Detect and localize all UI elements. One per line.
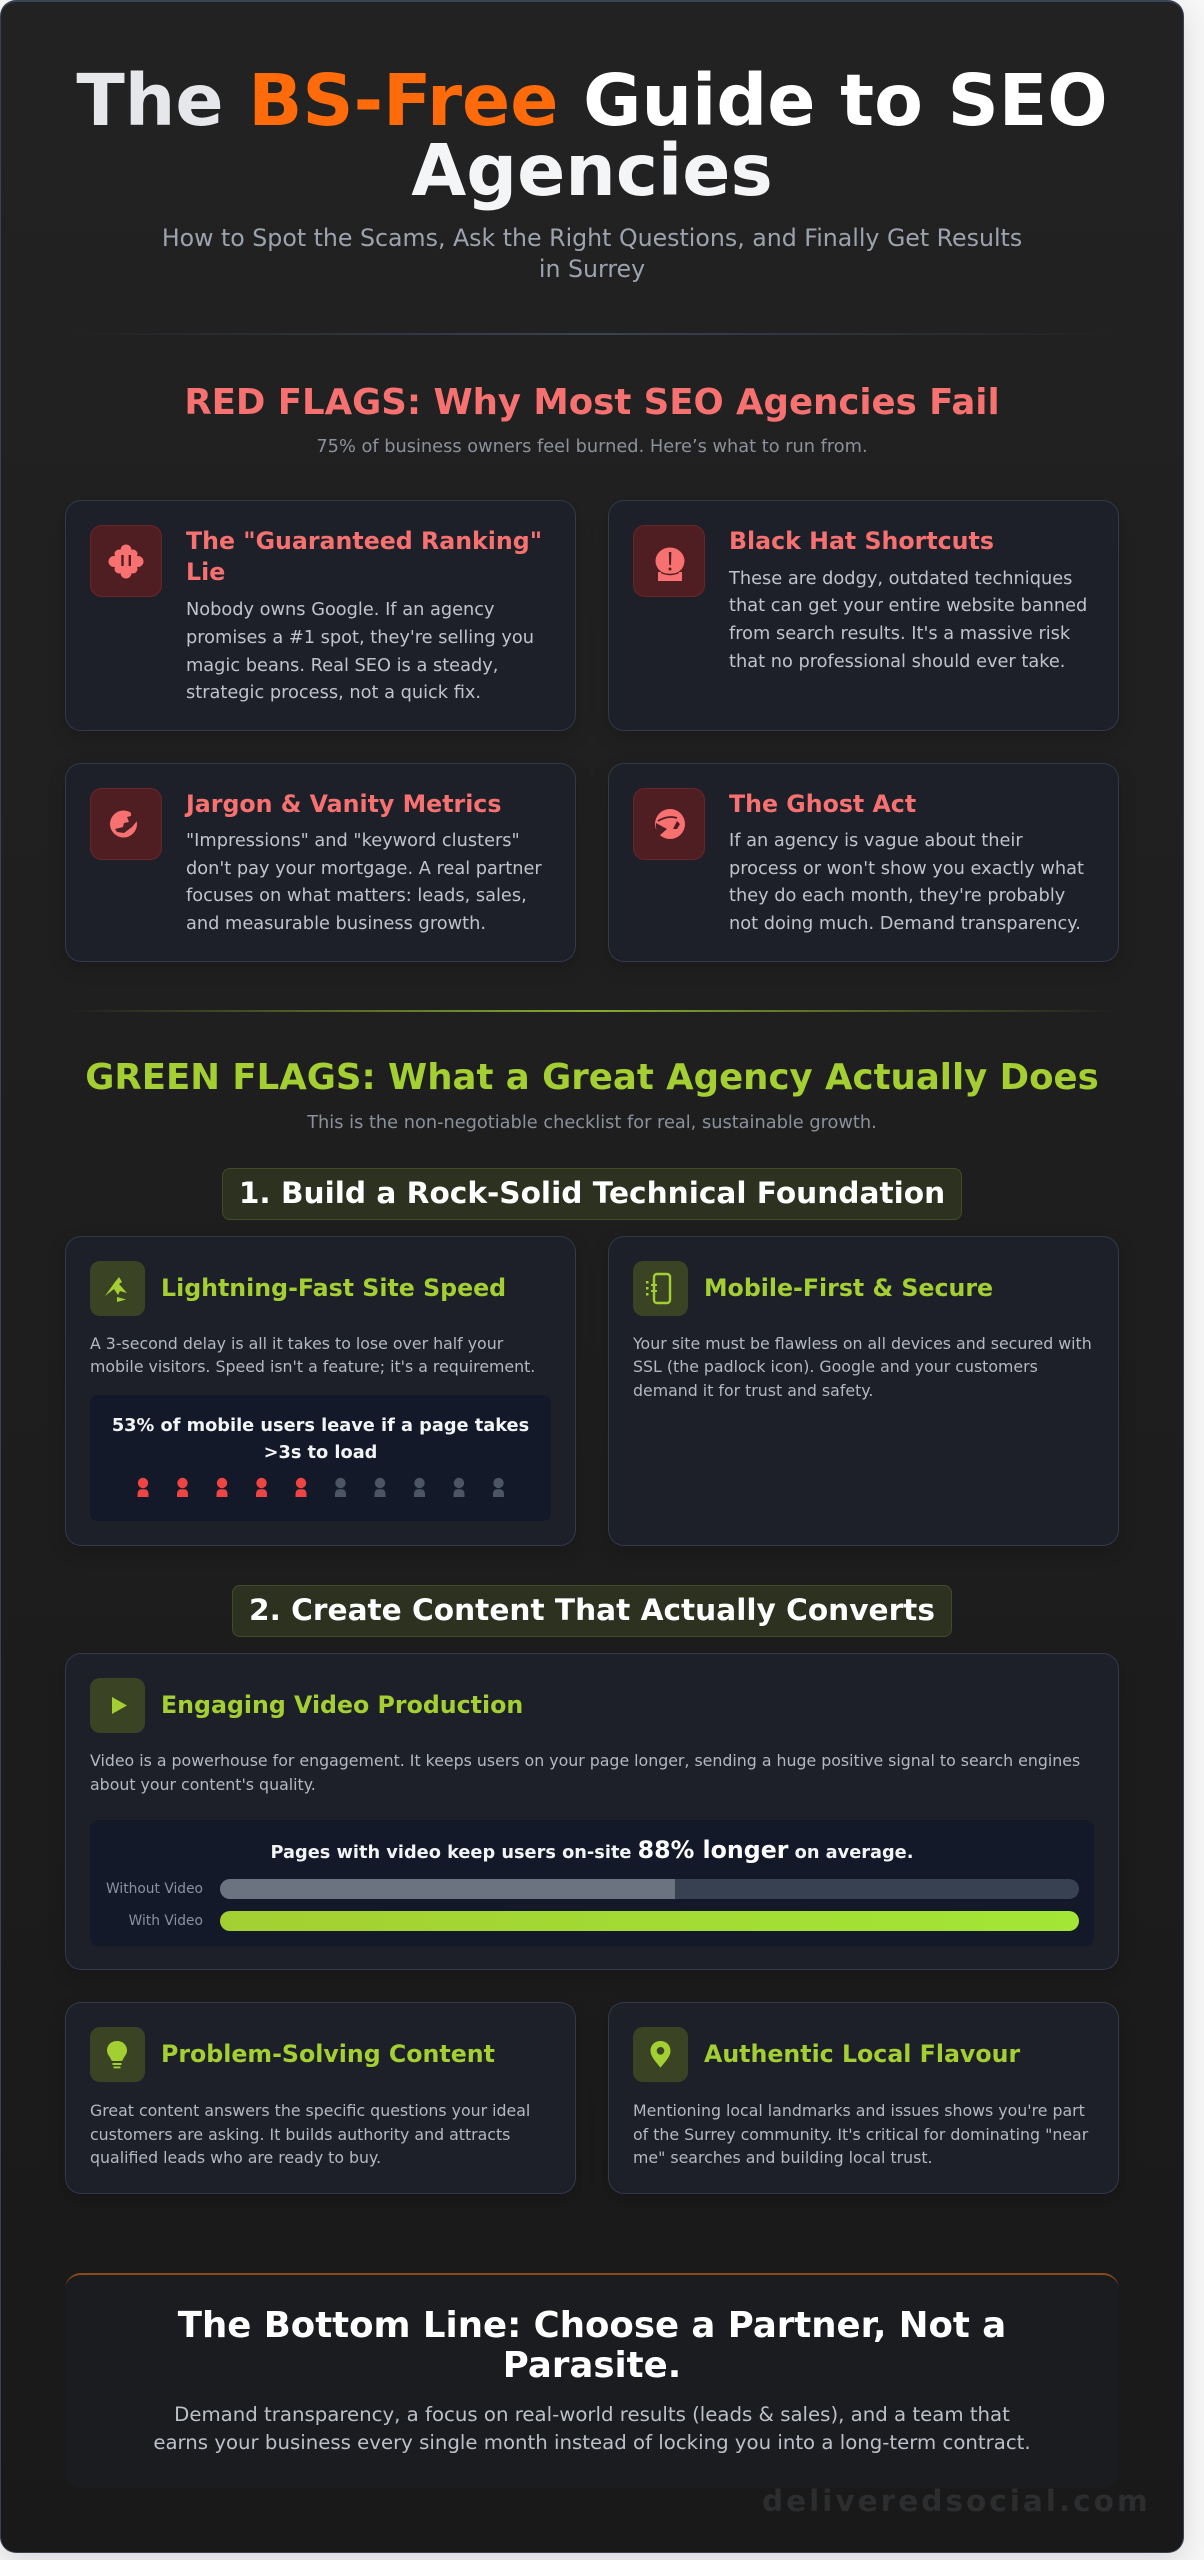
card text: qualified leads who are ready to buy. [90,2148,381,2167]
title: The BS-Free Guide to SEO [76,59,1108,142]
icon: map pin [633,2027,688,2082]
chart: time on site [90,1820,1094,1946]
card text: customers are asking. It builds authority and attracts [90,2125,510,2144]
card title [186,527,542,586]
panel: video production [65,1653,1119,1970]
card text: they do each month, they're probably [729,886,1065,906]
card title: Authentic Local Flavour [704,2040,1020,2068]
panel: guaranteed ranking [65,500,576,731]
callout text: Demand transparency, a focus on real-world results (leads & sales), and a team that [174,2403,1010,2426]
card text: demand it for trust and safety. [633,1381,873,1400]
card text: and measurable business growth. [186,914,486,934]
card title: Problem-Solving Content [161,2040,495,2068]
chart title: Pages with video keep users on-site 88% longer on average. [271,1836,913,1864]
icon: crossed circle [633,788,705,860]
card text: Mentioning local landmarks and issues shows you're part [633,2101,1085,2120]
card text: process or won't show you exactly what [729,859,1084,879]
stat text: 53% of mobile users leave if a page takes [112,1416,529,1436]
card text: Nobody owns Google. If an agency [186,600,495,620]
card text [633,1334,1092,1400]
card text [186,600,534,703]
card text: that no professional should ever take. [729,652,1065,672]
card text: from search results. It's a massive risk [729,624,1070,644]
card text: mobile visitors. Speed isn't a feature; it's a requirement. [90,1357,535,1376]
card text: Your site must be flawless on all devices and secured with [633,1334,1092,1352]
stat box: 53% mobile users [90,1395,551,1521]
subtitle: How to Spot the Scams, Ask the Right Questions, and Finally Get Results [162,224,1022,252]
subheading: technical foundation: 1. Build a Rock-Solid Technical Foundation [239,1176,945,1210]
subtitle [162,224,1022,283]
watermark: deliveredsocial.com [762,2484,1151,2518]
card text: Great content answers the specific questions your ideal [90,2101,530,2120]
callout heading [178,2304,1006,2386]
card text [90,1334,535,1376]
callout: bottom line [65,2273,1119,2488]
card title: Black Hat Shortcuts [729,527,994,555]
card text: Video is a powerhouse for engagement. It keeps users on your page longer, sending a huge positive signal to search engines [90,1751,1080,1770]
bar: with video [220,1911,1078,1931]
card text: These are dodgy, outdated techniques [729,568,1072,588]
card text: SSL (the padlock icon). Google and your customers [633,1357,1038,1376]
callout text [153,2403,1031,2454]
panel: ghost act [608,763,1119,962]
card text: me" searches and building local trust. [633,2148,933,2167]
subheading: content [232,1585,952,1637]
card text [90,1751,1080,1794]
card text: promises a #1 spot, they're selling you [186,628,534,648]
card text: that can get your entire website banned [729,596,1087,616]
panel: jargon [65,763,576,962]
card text: don't pay your mortgage. A real partner [186,859,542,879]
callout heading: The Bottom Line: Choose a Partner, Not a [178,2304,1006,2346]
panel: black hat [608,500,1119,731]
icon: play [90,1678,145,1733]
green flags intro: This is the non-negotiable checklist for real, sustainable growth. [307,1113,877,1133]
icon: mobile [633,1261,688,1316]
card text: A 3-second delay is all it takes to lose over half your [90,1334,503,1352]
card title: Mobile-First & Secure [704,1274,993,1302]
card text: If an agency is vague about their [729,831,1023,851]
card text [633,2101,1088,2167]
card text [90,2101,530,2167]
card text: not doing much. Demand transparency. [729,914,1081,934]
card text: about your content's quality. [90,1775,316,1794]
stat text [112,1416,529,1463]
callout text: earns your business every single month instead of locking you into a long-term contract. [153,2431,1031,2454]
card text: of the Surrey community. It's critical for dominating "near [633,2125,1088,2144]
panel: local flavour [608,2002,1119,2194]
card text: focuses on what matters: leads, sales, [186,886,527,906]
icon: light bulb [90,2027,145,2082]
heading: green flags: GREEN FLAGS: What a Great Agency Actually Does [85,1057,1099,1098]
panel: problem solving [65,2002,576,2194]
card text [729,831,1084,934]
card title: Lie [186,558,225,586]
icon: warning dome [633,525,705,597]
card title: Lightning-Fast Site Speed [161,1274,506,1302]
title: Agencies [411,129,773,212]
bar: without video [220,1879,1078,1899]
card text: magic beans. Real SEO is a steady, [186,656,498,676]
red flags intro: 75% of business owners feel burned. Here’s what to run from. [316,436,868,456]
card text [728,568,1087,672]
subheading: content: 2. Create Content That Actually Converts [249,1593,935,1627]
bar label: with video: With Video [129,1912,203,1928]
title [76,59,1108,212]
heading: red flags: RED FLAGS: Why Most SEO Agencies Fail [184,382,1000,422]
card text [186,831,542,934]
card title: The "Guaranteed Ranking" [186,527,542,555]
stat text: >3s to load [264,1443,377,1463]
card title: The Ghost Act [729,790,916,818]
icon: lightning [90,1261,145,1316]
callout heading: Parasite. [503,2344,681,2386]
bar label: without video: Without Video [106,1881,203,1897]
card title: Engaging Video Production [161,1690,523,1718]
panel: mobile first [608,1236,1119,1546]
card text: "Impressions" and "keyword clusters" [186,831,520,851]
pictogram: users leaving [138,1478,504,1497]
card text: strategic process, not a quick fix. [186,683,481,703]
panel: site speed [65,1236,576,1546]
card title: Jargon & Vanity Metrics [186,790,501,818]
subtitle: in Surrey [539,255,645,283]
subheading: technical foundation [222,1168,962,1220]
icon: globe [90,788,162,860]
icon: broken diamond [90,525,162,597]
